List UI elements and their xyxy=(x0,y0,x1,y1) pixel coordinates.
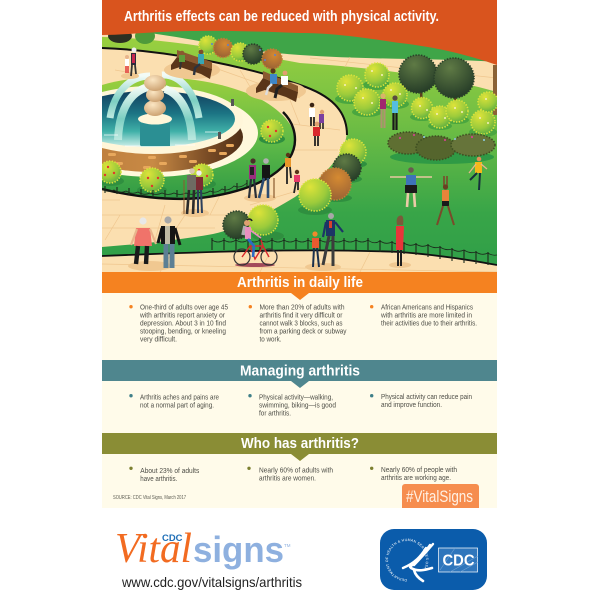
bullet column 1: have arthritis. xyxy=(140,476,177,483)
walkway bushes xyxy=(223,139,367,241)
person: bench sitter teal xyxy=(194,50,204,75)
far dark lawn xyxy=(154,30,486,62)
footer xyxy=(102,508,497,600)
bullet column 1 xyxy=(129,304,228,344)
person: stretching woman xyxy=(437,176,454,225)
hashtag tag xyxy=(402,484,479,508)
person: yellow jogger xyxy=(469,157,487,190)
HHS seal ring: DEPARTMENT OF HEALTH & HUMAN SERVICES USA xyxy=(386,538,428,582)
walkway xyxy=(102,49,347,247)
person: elderly couple xyxy=(181,168,209,217)
main lawn xyxy=(102,37,497,272)
heading band teal: Managing arthritis xyxy=(240,364,360,380)
top bushes xyxy=(108,28,282,69)
fountain xyxy=(102,72,258,177)
bullet column 3 xyxy=(370,304,477,328)
person: jogger and child xyxy=(285,153,300,193)
section: Who has arthritis? xyxy=(102,433,497,483)
person: bench sitter green xyxy=(179,51,185,69)
heading band olive: Who has arthritis? xyxy=(241,436,359,452)
people xyxy=(121,48,487,271)
fountain lawn xyxy=(102,77,295,199)
bullet column 2: swimming, biking—is good xyxy=(259,402,336,410)
person: man and boy xyxy=(305,213,343,271)
bullet column 3: African Americans and Hispanics xyxy=(381,304,473,312)
icon: eagle xyxy=(403,544,433,581)
bullet column 2: Nearly 60% of adults with xyxy=(259,467,333,474)
person: runners xyxy=(309,103,324,146)
CDC box: CDC xyxy=(442,552,475,570)
person: red dress woman xyxy=(389,215,411,268)
hashtag tag: #VitalSigns xyxy=(406,487,473,506)
bullet column 1: Arthritis aches and pains are xyxy=(140,394,219,402)
Vital Signs logo: TM xyxy=(284,543,291,548)
bullet column 3: Physical activity can reduce pain xyxy=(381,394,472,401)
heading band olive xyxy=(102,433,497,461)
person: couple on lawn xyxy=(380,93,398,130)
bullet column 1: not a normal part of aging. xyxy=(140,402,214,410)
bullet column 2: cannot walk 3 blocks, such as xyxy=(260,320,343,328)
bottom paving xyxy=(102,250,497,272)
bullet column 3: with arthritis are more limited in xyxy=(380,312,472,320)
heading band orange xyxy=(102,272,497,300)
right lawn bushes and trees xyxy=(335,55,498,137)
person: bench sitter white xyxy=(275,71,288,98)
website url: www.cdc.gov/vitalsigns/arthritis xyxy=(121,574,302,590)
park illustration xyxy=(102,30,497,272)
bullet column 1: One-third of adults over age 45 xyxy=(140,304,228,312)
bullet column 2: arthritis are women. xyxy=(259,475,316,482)
bullet column 3: arthritis are working age. xyxy=(381,475,451,482)
bullet column 1: About 23% of adults xyxy=(140,468,200,475)
bullet column 1: very difficult. xyxy=(140,336,177,344)
Vital Signs logo: CDC xyxy=(162,533,183,544)
source note: SOURCE: CDC Vital Signs, March 2017 xyxy=(113,495,186,501)
bullet column 2: from a parking deck or subway xyxy=(260,328,347,336)
walkway border xyxy=(102,48,347,135)
Vital Signs logo: Vital xyxy=(115,526,192,572)
bullet column 1 xyxy=(129,467,200,483)
bullet column 3 xyxy=(370,394,472,409)
bullet column 2 xyxy=(248,394,336,418)
person: walkers with cane xyxy=(244,158,276,202)
person: bench sitter blue xyxy=(266,68,277,95)
title banner xyxy=(102,0,497,65)
paving xyxy=(102,34,497,91)
bullet column 3: Nearly 60% of people with xyxy=(381,467,457,474)
HHS CDC logo xyxy=(380,529,487,590)
Vital Signs logo xyxy=(115,526,291,572)
person: woman and child top left xyxy=(121,48,139,79)
bullet column 1: with arthritis report anxiety or xyxy=(139,312,226,320)
background panel xyxy=(102,0,497,600)
fences xyxy=(102,180,497,265)
bullet column 2: to work. xyxy=(260,336,282,344)
bullet column 2: Physical activity—walking, xyxy=(259,394,333,402)
flower hedge xyxy=(388,132,495,164)
Vital Signs logo: signs xyxy=(193,529,284,570)
section: Arthritis in daily life xyxy=(102,272,497,344)
bullet column 1: depression. About 3 in 10 find xyxy=(140,320,226,328)
paving joints xyxy=(102,57,497,240)
benches xyxy=(164,50,306,102)
title: Arthritis effects can be reduced with physical activity. xyxy=(124,9,439,25)
person: exercisers xyxy=(390,167,432,207)
bullet column 2 xyxy=(249,304,347,344)
bullet column 3: their activities due to their arthritis. xyxy=(381,320,477,328)
bullet column 2: More than 20% of adults with xyxy=(260,304,345,312)
section: Managing arthritis xyxy=(102,360,497,418)
bullet column 3 xyxy=(370,467,457,482)
bullet column 2: arthritis find it very difficult or xyxy=(260,312,343,320)
person: cyclist xyxy=(234,219,277,267)
bullet column 1: stooping, bending, or kneeling xyxy=(140,328,226,336)
heading band teal xyxy=(102,360,497,388)
fountain lawn bushes xyxy=(96,120,285,195)
bullet column 1 xyxy=(129,394,219,410)
bullet column 2 xyxy=(247,467,333,482)
heading band orange: Arthritis in daily life xyxy=(237,275,363,291)
person: couple foreground xyxy=(128,216,180,271)
bullet column 3: and improve function. xyxy=(381,402,442,409)
bullet column 2: for arthritis. xyxy=(259,410,291,418)
